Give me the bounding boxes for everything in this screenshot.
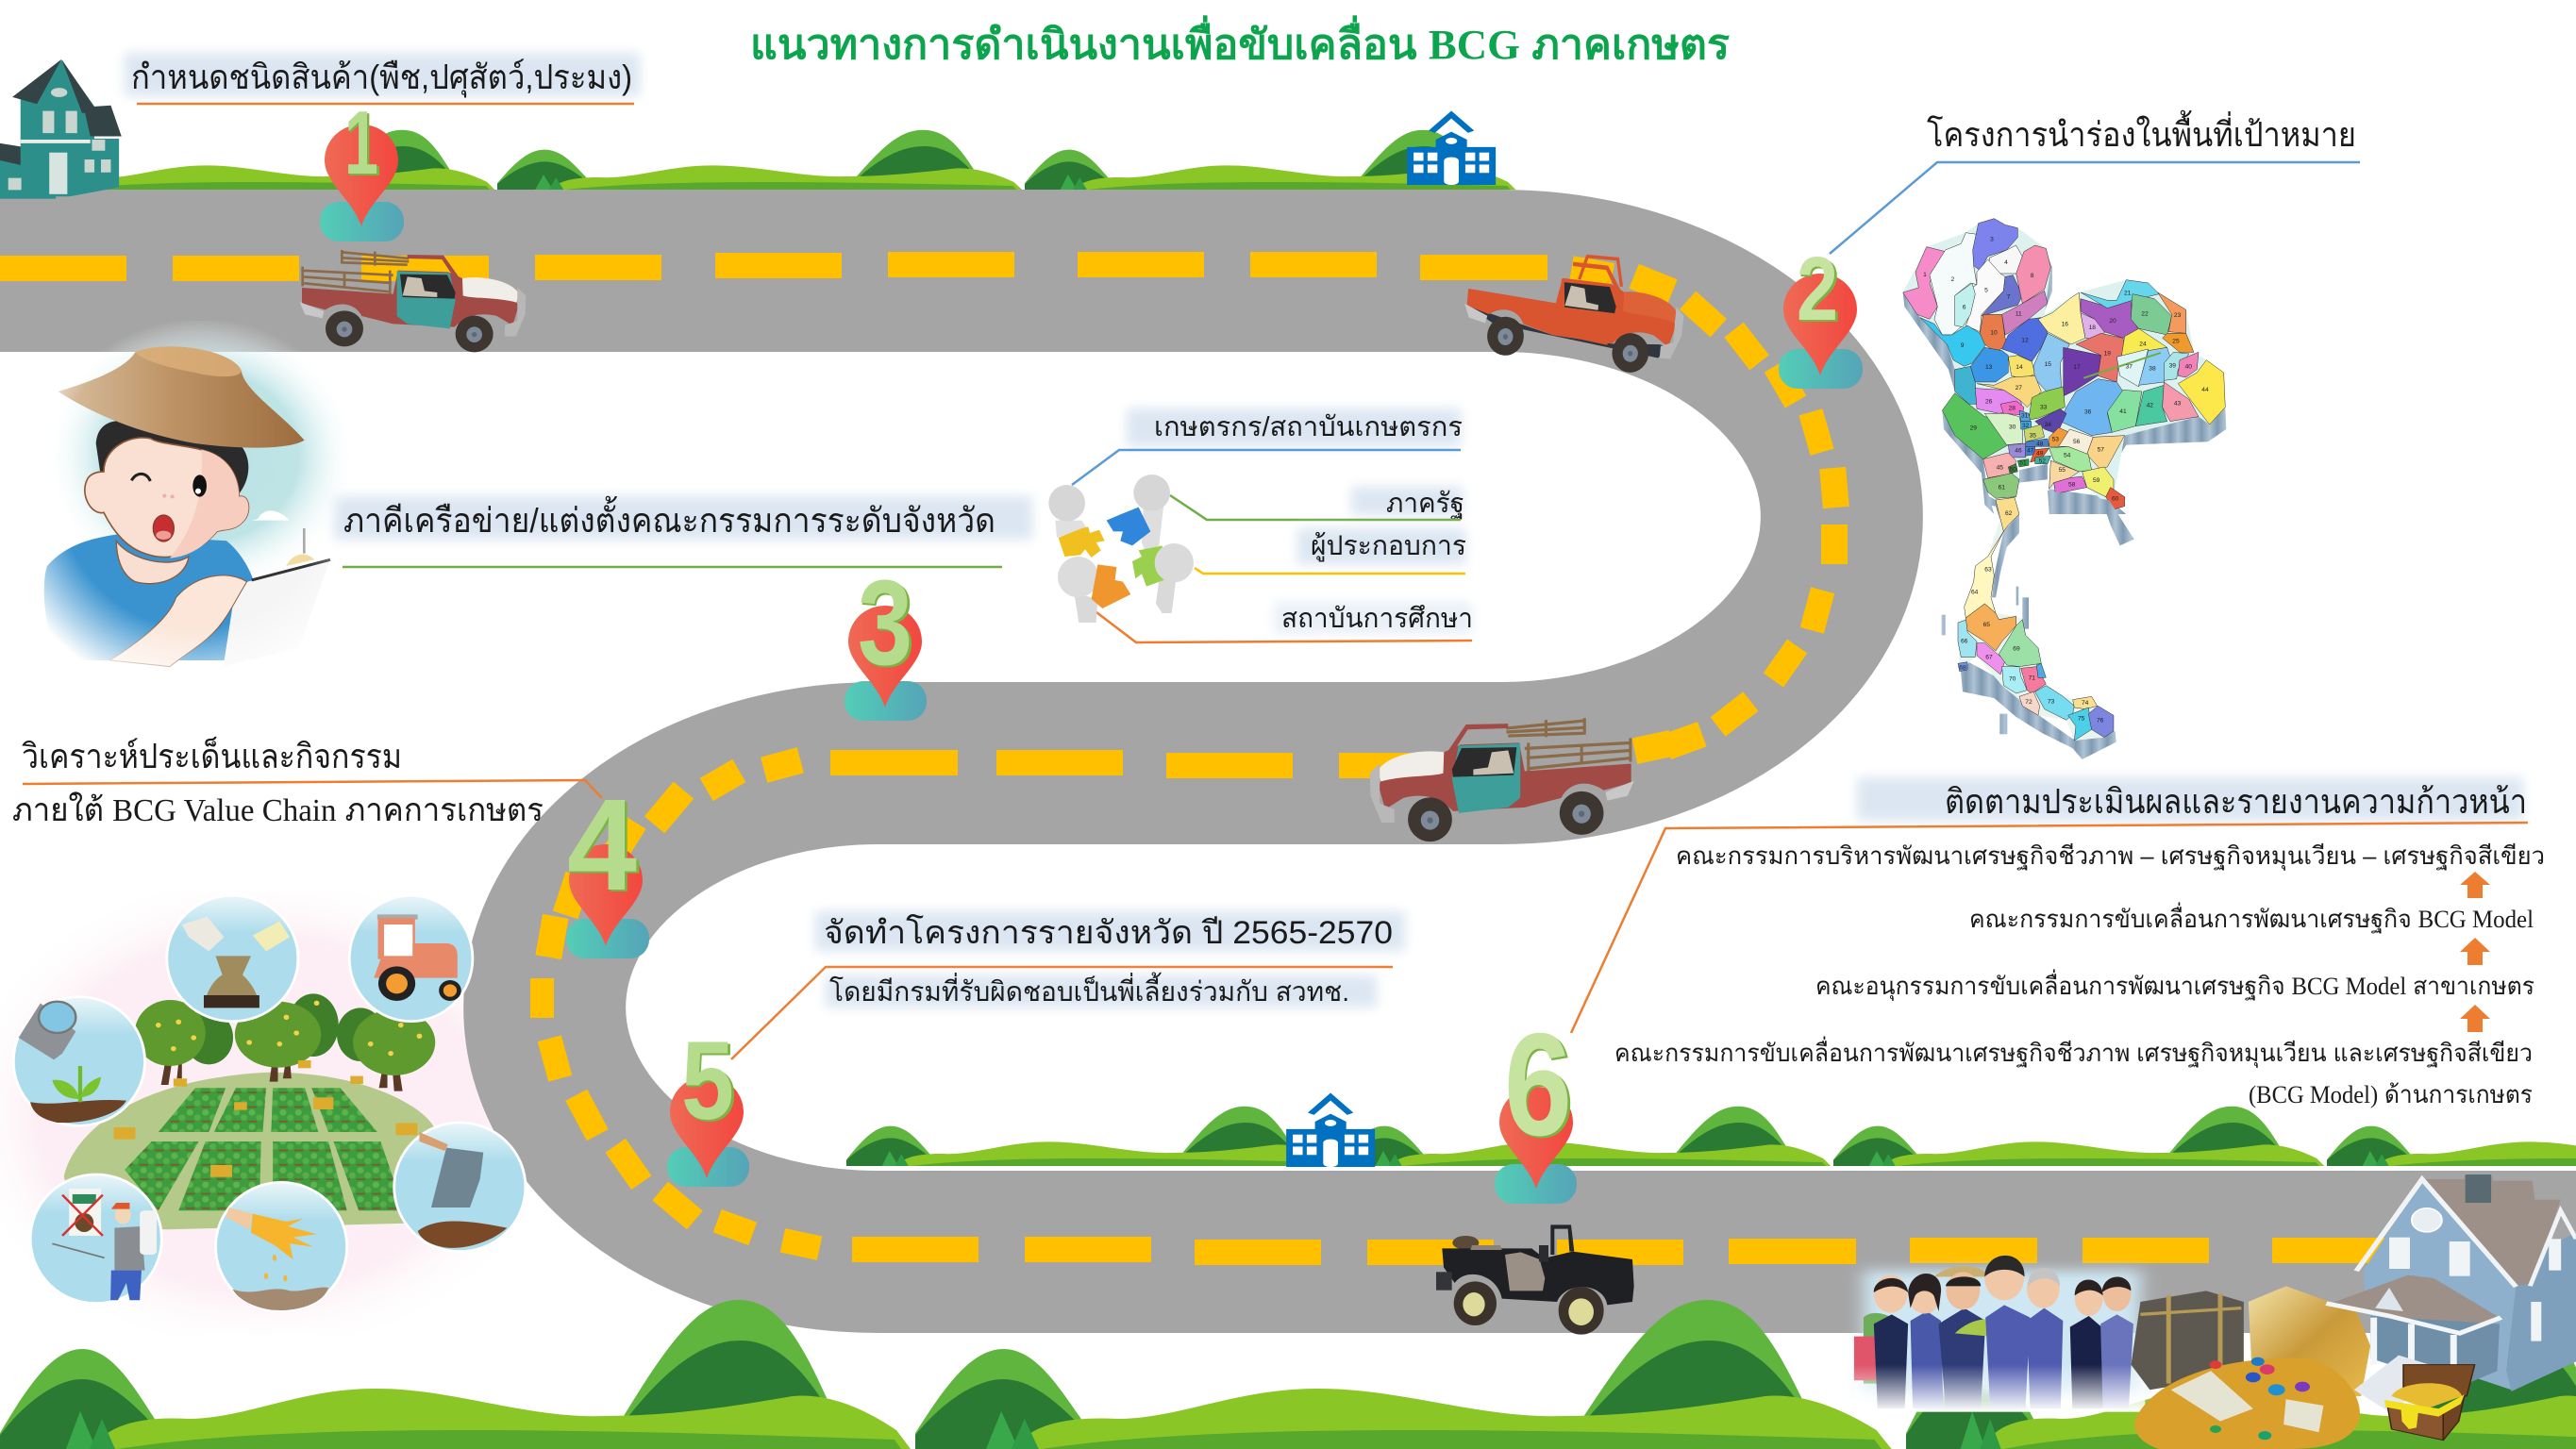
circle: sprayer worker xyxy=(30,1174,161,1304)
pin 5: 5 xyxy=(681,1019,734,1143)
step 6 label and committee hierarchy: คณะกรรมการขับเคลื่อนการพัฒนาเศรษฐกิจชีวภาพ เศรษฐกิจหมุนเวียน และเศรษฐกิจสีเขียว xyxy=(1614,1036,2533,1068)
northern and central Thailand: 26 xyxy=(1985,399,1993,406)
northern and central Thailand: 33 xyxy=(2040,405,2048,411)
hills: middle row xyxy=(842,1107,2576,1166)
pin 3: 3 xyxy=(858,556,912,691)
circle: fertiliser sack xyxy=(167,895,298,1022)
pin 1 xyxy=(320,92,404,242)
northern and central Thailand: 20 xyxy=(2109,318,2116,325)
northern and central Thailand: 23 xyxy=(2174,312,2182,319)
northern and central Thailand: 27 xyxy=(2016,385,2022,391)
network labels: ภาครัฐ xyxy=(1386,489,1464,520)
step 3 label xyxy=(334,495,1032,567)
step 4 label: ภายใต้ BCG Value Chain ภาคการเกษตร xyxy=(12,791,544,828)
northern and central Thailand: 12 xyxy=(2021,338,2029,344)
step 6 label and committee hierarchy xyxy=(1571,777,2545,1108)
step 5 label: จัดทำโครงการรายจังหวัด ปี 2565-2570 xyxy=(824,914,1393,951)
pin 1: 1 xyxy=(344,92,378,193)
northern and central Thailand: 7 xyxy=(2007,294,2011,301)
northern and central Thailand: 51 xyxy=(2019,460,2027,467)
northern and central Thailand: 42 xyxy=(2147,403,2153,409)
pin 2 xyxy=(1779,239,1863,389)
southern peninsula: 72 xyxy=(2025,699,2032,706)
northern and central Thailand: 24 xyxy=(2139,341,2147,348)
title: แนวทางการดำเนินงานเพื่อขับเคลื่อน BCG ภาคเกษตร xyxy=(750,15,1730,68)
icon: teal house top-left xyxy=(0,59,122,199)
northern and central Thailand: 10 xyxy=(1990,330,1998,337)
plot signs xyxy=(114,1060,417,1177)
northern and central Thailand: 30 xyxy=(2009,424,2016,430)
crop plots xyxy=(125,1088,404,1210)
northern and central Thailand: 60 xyxy=(2112,495,2119,502)
northern and central Thailand: 43 xyxy=(2174,400,2182,407)
pin 5 xyxy=(667,1019,749,1187)
network labels xyxy=(1072,408,1473,642)
truck: maroon on top road xyxy=(299,250,526,352)
person 7 xyxy=(2100,1276,2133,1408)
southern peninsula: 66 xyxy=(1961,638,1968,644)
person 3 xyxy=(1938,1272,1985,1408)
network labels: สถาบันการศึกษา xyxy=(1281,604,1473,634)
icon: open treasure chest xyxy=(2384,1365,2475,1441)
northern and central Thailand: 3 xyxy=(1990,237,1994,243)
network labels: เกษตรกร/สถาบันเกษตรกร xyxy=(1154,412,1463,442)
truck: maroon mirrored on middle road xyxy=(1370,718,1634,841)
step 5 label: โดยมีกรมที่รับผิดชอบเป็นพี่เลี้ยงร่วมกับ สวทช. xyxy=(829,972,1349,1008)
northern and central Thailand: 49 xyxy=(2036,450,2044,457)
villagers group xyxy=(1854,1256,2145,1412)
northern and central Thailand: 39 xyxy=(2169,363,2176,370)
person 4 xyxy=(1984,1256,2030,1408)
northern and central Thailand: 17 xyxy=(2073,364,2081,371)
northern and central Thailand: 47 xyxy=(2027,447,2034,454)
northern and central Thailand: 18 xyxy=(2089,325,2096,331)
step 2 label: โครงการนำร่องในพื้นที่เป้าหมาย xyxy=(1927,109,2356,154)
northern and central Thailand: 15 xyxy=(2045,361,2051,368)
step 6 label and committee hierarchy: คณะกรรมการบริหารพัฒนาเศรษฐกิจชีวภาพ – เศรษฐกิจหมุนเวียน – เศรษฐกิจสีเขียว xyxy=(1676,841,2545,871)
southern peninsula: 75 xyxy=(2078,715,2085,722)
northern and central Thailand: 5 xyxy=(1984,288,1988,294)
circle: gloved hand sowing xyxy=(215,1182,347,1311)
orchard trees xyxy=(135,993,435,1091)
northern and central Thailand: 61 xyxy=(1999,484,2005,491)
southern peninsula: 74 xyxy=(2082,700,2089,707)
pin 6: 6 xyxy=(1504,1003,1572,1166)
northern and central Thailand: 35 xyxy=(2030,433,2036,440)
northern and central Thailand: 52 xyxy=(2039,458,2046,464)
hills: upper row xyxy=(0,130,1515,190)
southern peninsula: 69 xyxy=(2013,645,2020,652)
southern peninsula: 68 xyxy=(1959,664,1966,671)
northern and central Thailand: 37 xyxy=(2126,364,2133,371)
northern and central Thailand: 16 xyxy=(2062,322,2068,328)
pin 2: 2 xyxy=(1798,241,1841,341)
northern and central Thailand: 55 xyxy=(2059,467,2066,474)
icon: puzzle people xyxy=(1048,475,1194,623)
northern and central Thailand: 57 xyxy=(2098,446,2104,453)
northern and central Thailand: 13 xyxy=(1985,364,1993,371)
pin 5: 5 xyxy=(682,1021,737,1145)
northern and central Thailand xyxy=(1903,219,2226,514)
pin 4 xyxy=(566,773,649,958)
northern and central Thailand: 9 xyxy=(1961,342,1965,349)
northern and central Thailand: 31 xyxy=(2021,412,2029,419)
northern and central Thailand: 4 xyxy=(2004,259,2008,266)
map: Thailand provinces xyxy=(1903,219,2226,759)
southern peninsula: 62 xyxy=(2005,510,2013,517)
northern and central Thailand: 1 xyxy=(1923,272,1927,278)
northern and central Thailand: 40 xyxy=(2185,363,2192,370)
road centre dashes xyxy=(0,252,2400,1265)
step 2 label xyxy=(1830,109,2360,254)
northern and central Thailand: 50 xyxy=(2010,466,2016,473)
field xyxy=(64,1073,436,1229)
northern and central Thailand: 2 xyxy=(1950,276,1954,283)
farm illustration xyxy=(13,895,526,1311)
step 6 label and committee hierarchy: ติดตามประเมินผลและรายงานความก้าวหน้า xyxy=(1945,782,2527,821)
farm background glow xyxy=(0,891,538,1335)
northern and central Thailand: 56 xyxy=(2073,439,2081,445)
northern and central Thailand: 53 xyxy=(2052,436,2059,442)
step 5 label xyxy=(731,911,1405,1059)
northern and central Thailand: 46 xyxy=(2015,448,2022,455)
southern peninsula: 70 xyxy=(2009,676,2016,683)
step 6 label and committee hierarchy: (BCG Model) ด้านการเกษตร xyxy=(2249,1080,2533,1108)
hills: foreground row xyxy=(0,1300,2576,1449)
treasure pile xyxy=(2131,1286,2370,1449)
southern peninsula: 71 xyxy=(2029,675,2035,681)
pin 1: 1 xyxy=(345,94,381,195)
southern peninsula: 65 xyxy=(1983,622,1990,628)
rice sheaf xyxy=(1955,1319,2026,1368)
northern and central Thailand: 34 xyxy=(2045,422,2051,428)
step 4 label: วิเคราะห์ประเด็นและกิจกรรม xyxy=(22,735,402,775)
southern peninsula: 73 xyxy=(2048,699,2055,706)
northern and central Thailand: 25 xyxy=(2172,338,2180,344)
network labels: ผู้ประกอบการ xyxy=(1311,531,1466,562)
person 2 xyxy=(1908,1274,1943,1408)
person 5 xyxy=(2027,1268,2063,1408)
road xyxy=(0,271,2576,1252)
pin 4: 4 xyxy=(567,773,637,918)
circle: tractor xyxy=(349,895,473,1022)
northern and central Thailand: 54 xyxy=(2064,452,2071,458)
circle: hoe and soil xyxy=(394,1123,526,1252)
southern peninsula xyxy=(1942,491,2134,759)
pin 6: 6 xyxy=(1505,1005,1575,1168)
northern and central Thailand: 48 xyxy=(2036,441,2044,447)
school icon top xyxy=(1407,115,1496,185)
northern and central Thailand: 19 xyxy=(2104,351,2111,358)
step 3 label: ภาคีเครือข่าย/แต่งตั้งคณะกรรมการระดับจังหวัด xyxy=(343,495,995,540)
northern and central Thailand: 44 xyxy=(2201,387,2209,393)
school icon bottom xyxy=(1286,1097,1375,1167)
pin 3: 3 xyxy=(859,558,915,692)
northern and central Thailand: 59 xyxy=(2093,477,2100,484)
step 1 label: กำหนดชนิดสินค้า(พืช,ปศุสัตว์,ประมง) xyxy=(131,58,632,98)
northern and central Thailand: 28 xyxy=(2009,405,2016,411)
northern and central Thailand: 41 xyxy=(2119,408,2127,415)
northern and central Thailand: 14 xyxy=(2016,364,2023,371)
northern and central Thailand: 58 xyxy=(2068,482,2076,489)
northern and central Thailand: 8 xyxy=(2031,273,2034,279)
step 6 label and committee hierarchy: คณะอนุกรรมการขับเคลื่อนการพัฒนาเศรษฐกิจ BCG Model สาขาเกษตร xyxy=(1815,969,2534,1001)
truck: orange on the bend xyxy=(1460,246,1688,376)
pin 2: 2 xyxy=(1797,239,1838,340)
pin 6 xyxy=(1495,1003,1577,1204)
northern and central Thailand: 38 xyxy=(2149,366,2156,373)
southern peninsula: 63 xyxy=(1984,566,1992,573)
northern and central Thailand: 45 xyxy=(1997,464,2003,471)
circle: watering seedling xyxy=(13,997,145,1125)
pin 3 xyxy=(845,556,927,721)
house: blue with porch xyxy=(2326,1174,2576,1412)
step 4 label xyxy=(12,735,602,828)
person 6 xyxy=(2070,1279,2108,1408)
northern and central Thailand: 21 xyxy=(2124,291,2132,297)
northern and central Thailand: 22 xyxy=(2141,310,2149,317)
jeep on lower road xyxy=(1436,1224,1634,1335)
northern and central Thailand: 36 xyxy=(2084,409,2092,416)
person 1 xyxy=(1874,1275,1908,1408)
step 6 label and committee hierarchy: คณะกรรมการขับเคลื่อนการพัฒนาเศรษฐกิจ BCG Model xyxy=(1969,902,2534,934)
pin 4: 4 xyxy=(568,774,640,920)
northern and central Thailand: 6 xyxy=(1963,305,1966,311)
northern and central Thailand: 29 xyxy=(1970,425,1977,432)
southern peninsula: 76 xyxy=(2097,718,2104,724)
southern peninsula: 67 xyxy=(1985,654,1993,660)
southern peninsula: 64 xyxy=(1971,589,1979,595)
farmer illustration xyxy=(44,318,359,667)
northern and central Thailand: 32 xyxy=(2022,423,2030,429)
northern and central Thailand: 11 xyxy=(2016,311,2022,318)
